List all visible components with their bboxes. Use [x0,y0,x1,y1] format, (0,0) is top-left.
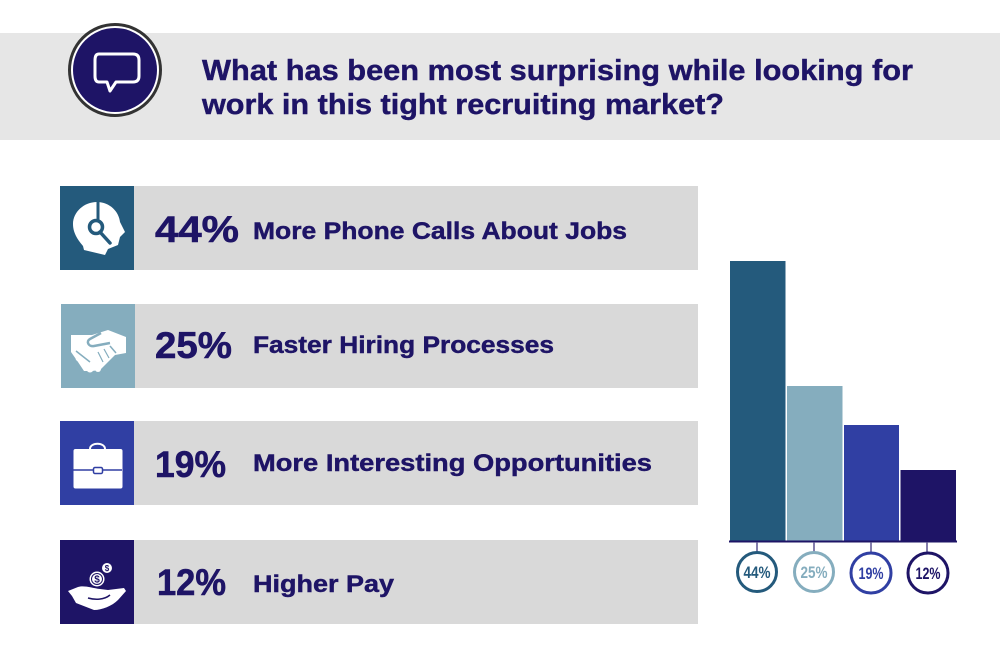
marker: 19%: 19% [858,564,884,583]
bar: 44% [730,261,786,541]
label: faster hiring: Faster Hiring Processes [253,332,554,359]
label: higher pay: Higher Pay [253,571,395,598]
bar: 12% [900,470,956,541]
title: What has been most surprising while looking for [202,55,913,87]
marker: 44%: 44% [744,563,770,582]
label: more interesting opportunities: More Interesting Opportunities [253,450,652,477]
icon: hand with coins: $ [94,574,100,586]
marker: 19% [851,553,891,593]
header band [0,24,1000,140]
marker: 25%: 25% [800,563,828,582]
bar: 25% [787,386,842,541]
bar chart [729,261,957,593]
row: 44% more phone calls [60,186,698,270]
stat: 12%: 12% [157,562,226,603]
bar: 19% [844,425,899,541]
icon: speech bubble [70,24,160,116]
icon: headset head [73,200,125,255]
marker: 12% [908,553,948,593]
marker: 25% [794,552,834,592]
title: work in this tight recruiting market? [201,89,724,121]
stat: 19%: 19% [155,444,226,485]
stat: 44%: 44% [155,209,239,250]
stat: 25%: 25% [155,325,232,366]
icon: briefcase [73,444,122,488]
row: 25% faster hiring [61,304,698,388]
row: 19% interesting opportunities [60,421,698,505]
icon: handshake [71,330,126,372]
icon: hand with coins [68,563,126,610]
icon: hand with coins: $ [105,564,110,573]
row: 12% higher pay [60,540,698,624]
marker: 12%: 12% [916,564,940,583]
title [201,55,913,121]
label: more phone calls: More Phone Calls About Jobs [253,218,627,245]
marker: 44% [738,552,776,592]
